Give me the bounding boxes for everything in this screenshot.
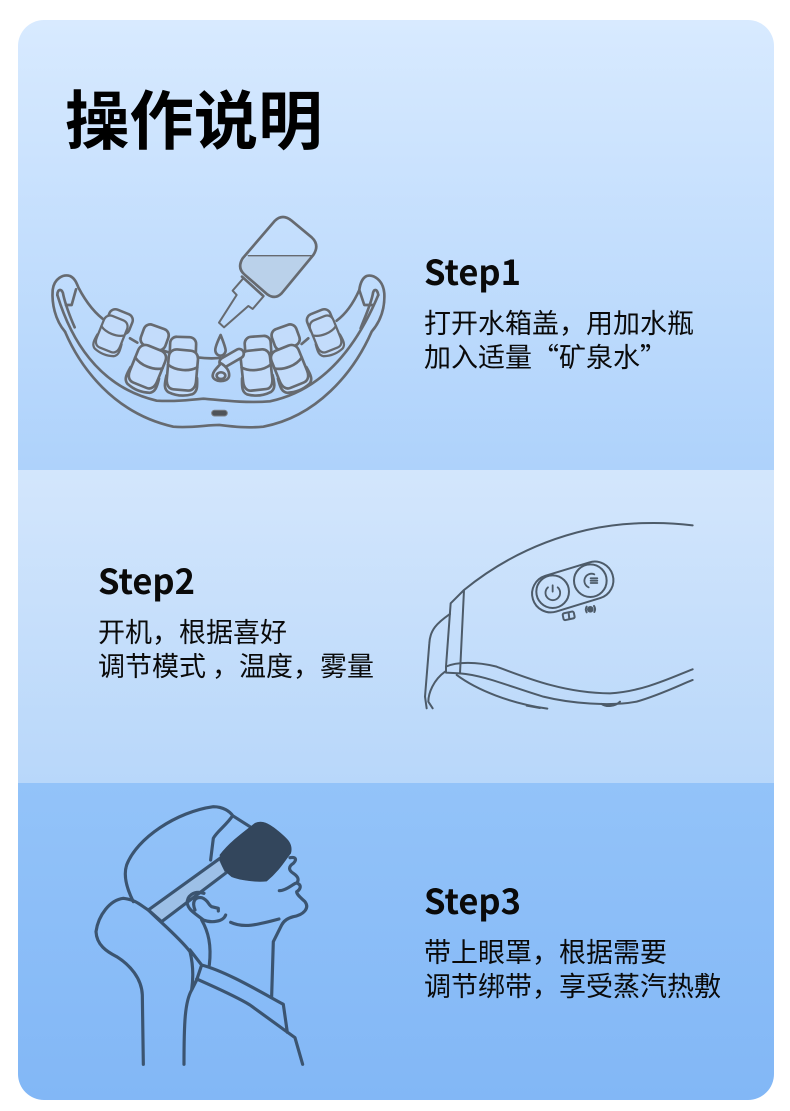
illustration: eye mask with water bottle [52,217,384,427]
step 2 heading: Step2 [98,554,195,604]
body and collar [148,910,303,1064]
control buttons [527,557,618,617]
panel: step 1 [18,20,774,470]
water bottle [219,217,316,327]
step 3 text: 带上眼罩，根据需要 调节绑带，享受蒸汽热敷 [424,931,721,1004]
strap [148,858,227,922]
mask outline [425,523,693,709]
face [272,857,307,997]
step 1 text: 打开水箱盖，用加水瓶 加入适量“矿泉水” [424,302,694,375]
neck and headrest [202,920,210,965]
ear [187,892,226,922]
panel: step 3 [18,783,774,1100]
battery and signal icons [562,606,595,620]
illustration: person wearing mask [96,807,307,1064]
hair [125,807,250,902]
eye mask [220,822,291,881]
indicator light [212,410,227,416]
panel: step 2 [18,470,774,783]
illustration: mask control buttons [425,523,693,709]
water tank cap [213,347,246,381]
pods left [91,307,200,397]
pods right [239,307,346,397]
step 2 text: 开机，根据喜好 调节模式 ，温度，雾量 [98,611,374,684]
step 1 heading: Step1 [424,245,521,295]
water drop [215,335,226,356]
title: 操作说明 [65,69,323,163]
step 3 heading: Step3 [424,874,521,924]
mask body outline [52,276,384,427]
